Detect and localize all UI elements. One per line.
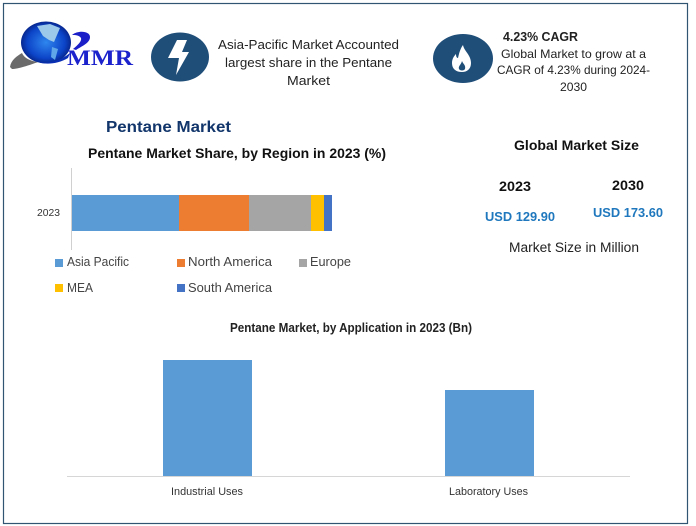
logo: MMR globe bbox=[10, 22, 134, 70]
callout: CAGR bbox=[497, 29, 650, 94]
title: Pentane Market bbox=[106, 119, 232, 136]
chart legend: North America bbox=[188, 255, 272, 269]
heading: global market size: Global Market Size bbox=[514, 137, 639, 153]
stacked bar chart: share by region: 2023 bbox=[37, 207, 60, 219]
stat: 2030 market size: USD 173.60 bbox=[593, 205, 663, 220]
bar chart: by application: Industrial Uses bbox=[171, 486, 243, 498]
chart legend bbox=[55, 255, 351, 295]
stat: 2030 market size bbox=[593, 177, 663, 220]
stat: 2023 market size bbox=[485, 178, 555, 224]
chart legend: Asia Pacific bbox=[67, 255, 129, 269]
logo: MMR globe: MMR bbox=[67, 45, 134, 70]
chart legend: MEA bbox=[67, 281, 94, 295]
heading: application chart: Pentane Market, by Application in 2023 (Bn) bbox=[230, 321, 472, 335]
callout: largest share: Asia-Pacific Market Accounted bbox=[218, 37, 399, 52]
stat: 2023 market size: 2023 bbox=[499, 178, 531, 194]
callout: largest share: largest share in the Pentane bbox=[225, 55, 392, 70]
callout: largest share: Market bbox=[287, 73, 330, 88]
heading: region chart: Pentane Market Share, by Region in 2023 (%) bbox=[88, 145, 386, 161]
chart legend: South America bbox=[188, 281, 272, 295]
stat: 2023 market size: USD 129.90 bbox=[485, 209, 555, 224]
callout: CAGR: 4.23% CAGR bbox=[503, 29, 579, 44]
stat: 2030 market size: 2030 bbox=[612, 177, 644, 193]
callout: CAGR: 2030 bbox=[560, 80, 587, 94]
bar chart: by application: Laboratory Uses bbox=[449, 486, 528, 498]
icon: lightning bolt bbox=[151, 32, 209, 82]
bar chart: by application bbox=[67, 360, 630, 498]
icon: flame bbox=[433, 34, 493, 83]
callout: largest share bbox=[218, 37, 399, 88]
stacked bar chart: share by region bbox=[37, 168, 332, 250]
note: unit: Market Size in Million bbox=[509, 240, 639, 255]
chart legend: Europe bbox=[310, 255, 351, 269]
callout: CAGR: Global Market to grow at a bbox=[501, 47, 646, 61]
callout: CAGR: CAGR of 4.23% during 2024- bbox=[497, 63, 650, 77]
